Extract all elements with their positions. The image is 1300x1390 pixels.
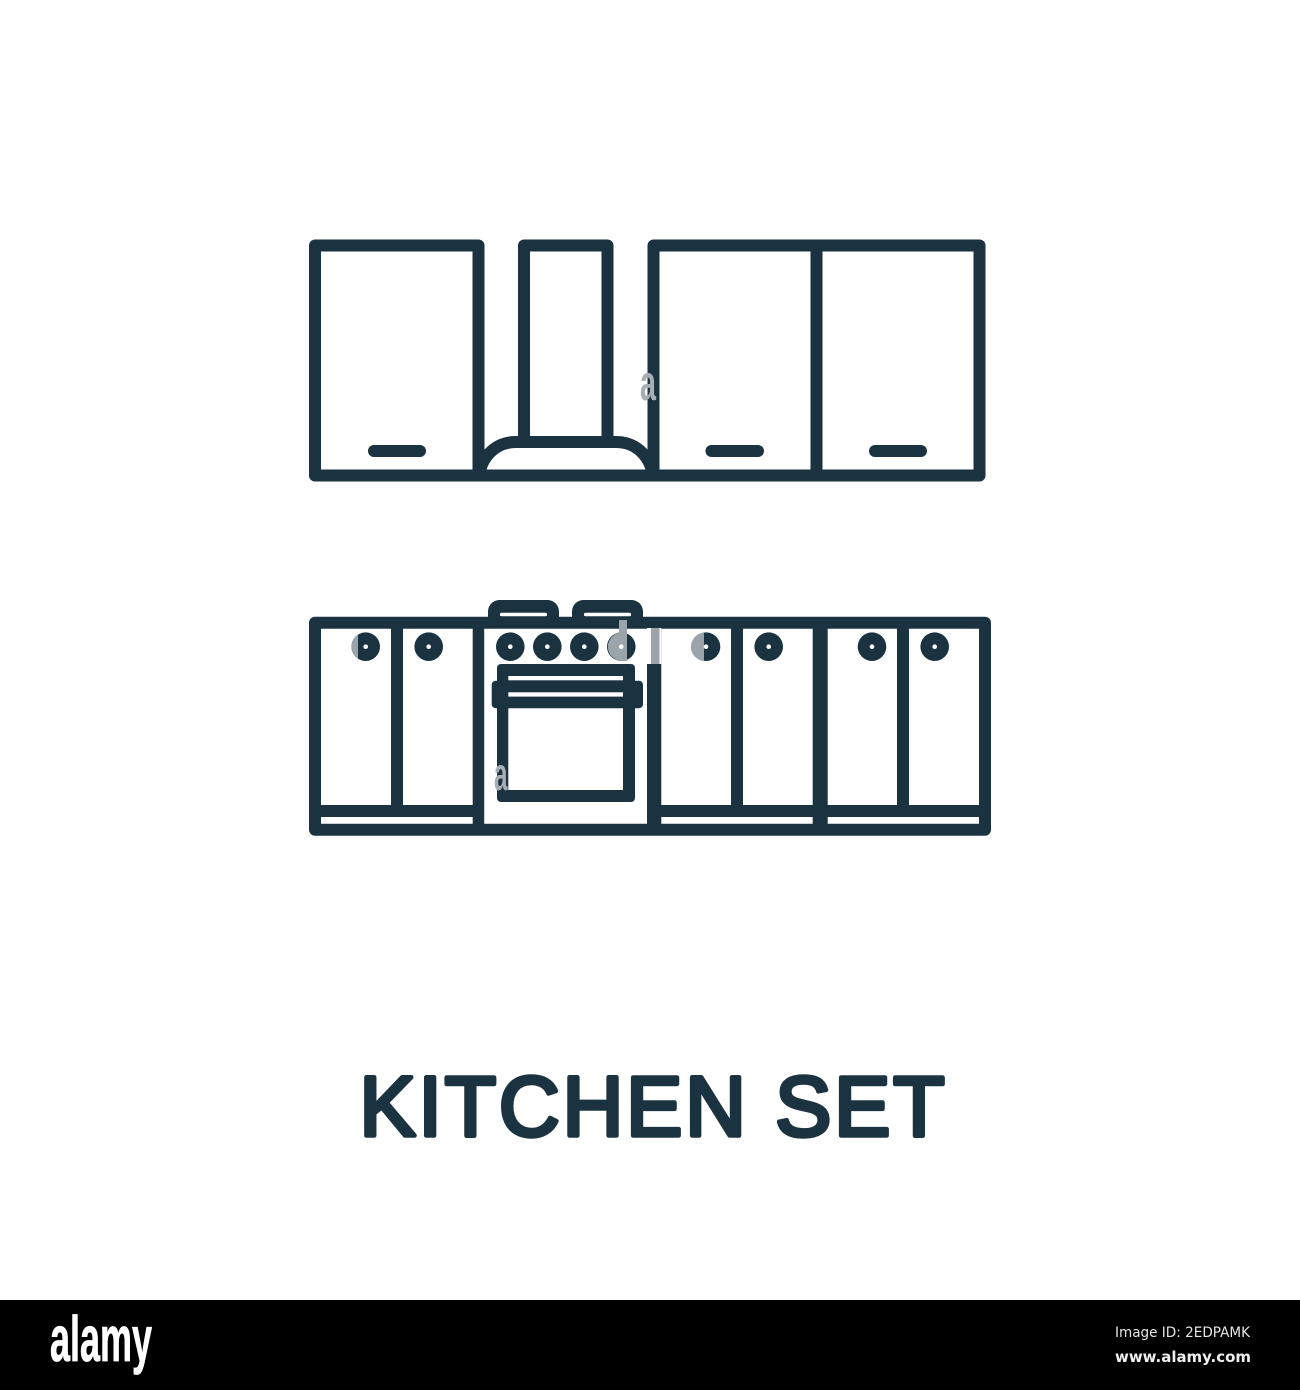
burners and knobs (351, 632, 949, 661)
footer bar (0, 1300, 1300, 1390)
alamy logo: alamy (50, 1303, 152, 1375)
middle cabinet handle (712, 445, 758, 457)
left wall cabinet (315, 246, 478, 476)
watermark remnants: a (494, 748, 508, 800)
image id: Image ID: 2EDPAMK (1115, 1325, 1250, 1341)
base cabinet dividers and shelves (315, 622, 985, 827)
range hood canopy (479, 442, 653, 476)
watermark remnants: a (640, 355, 657, 411)
left cabinet handle (374, 445, 420, 457)
base cabinet frame (315, 623, 985, 830)
range hood chimney (524, 246, 608, 442)
oven (492, 664, 643, 802)
watermark remnants (351, 355, 937, 800)
right cabinet handle (875, 445, 921, 457)
icon: wall cabinets and range hood (315, 246, 980, 476)
right wall cabinet (816, 246, 980, 476)
stove back knobs (488, 600, 643, 620)
icon: base cabinets with stove (315, 355, 985, 830)
title: KITCHEN SET (360, 1060, 944, 1154)
website: www.alamy.com (1115, 1348, 1251, 1366)
middle wall cabinet (654, 246, 816, 476)
